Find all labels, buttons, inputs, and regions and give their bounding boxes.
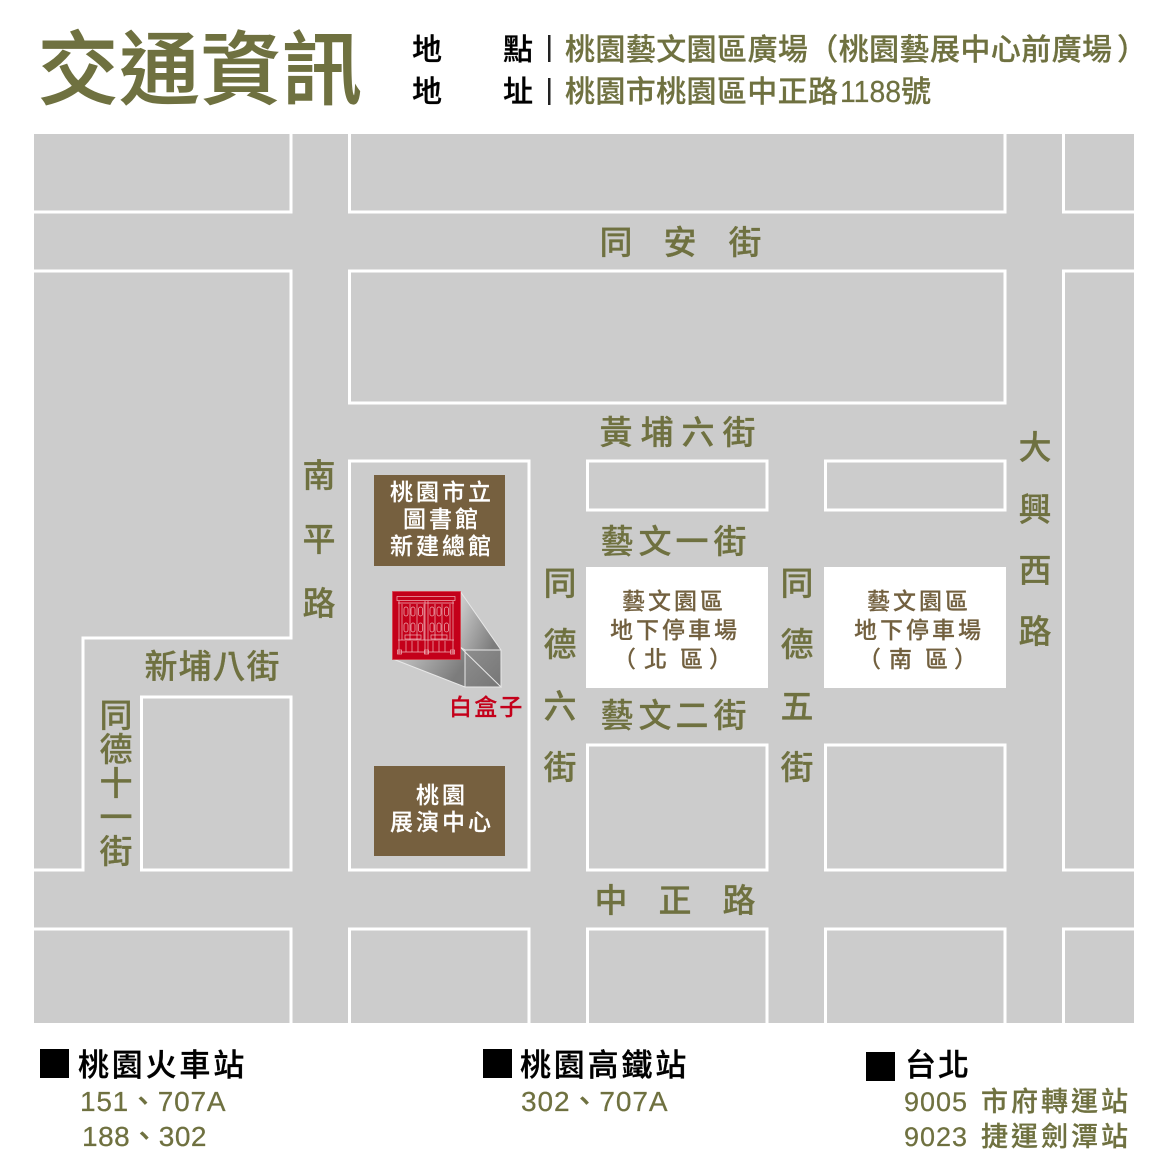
road: 黃埔六街 <box>600 414 756 451</box>
road: 同德六街: 六 <box>544 688 576 725</box>
road: 同德六街: 同 <box>544 565 576 602</box>
location info <box>412 34 1147 109</box>
road: 中正路 <box>594 882 756 919</box>
location info: 桃園市桃園區中正路 <box>565 76 838 109</box>
transit: Taoyuan station: 桃園火車站 <box>78 1048 247 1083</box>
building: library: 新建總館 <box>390 533 494 559</box>
road: 南平路: 路 <box>302 585 336 622</box>
transit: Taipei <box>866 1048 1131 1152</box>
road: 同德六街: 街 <box>544 749 576 786</box>
transit: Taipei: 9005 <box>904 1087 968 1117</box>
road: 新埔八街: 埔 <box>178 648 212 685</box>
transit: high speed rail <box>483 1048 689 1117</box>
parking: north: 藝文園區 <box>622 588 726 614</box>
transit: Taipei: 市府轉運站 <box>981 1087 1131 1117</box>
road: 南平路: 南 <box>302 457 336 494</box>
road: 同德五街: 同 <box>780 565 814 602</box>
road: 中正路: 中 <box>594 882 628 919</box>
transit: Taipei: 9023 <box>904 1122 968 1152</box>
parking: north: （ <box>613 646 636 672</box>
transit: Taoyuan station: 188、302 <box>82 1121 208 1152</box>
road: 新埔八街 <box>144 648 280 685</box>
road: 同德十一街: 十 <box>100 765 132 802</box>
road: 同德五街: 德 <box>780 626 814 663</box>
transit: high speed rail: 302、707A <box>521 1086 669 1117</box>
road: 藝文二街: 街 <box>714 697 746 734</box>
road: 藝文一街 <box>600 523 746 560</box>
building: library: 圖書館 <box>403 506 481 532</box>
parking: north: 地下停車場 <box>610 617 740 643</box>
road: 大興西路: 大 <box>1018 429 1052 466</box>
road: 新埔八街: 街 <box>246 648 280 685</box>
location info: ） <box>1117 34 1147 67</box>
road: 同德十一街: 同 <box>100 697 132 734</box>
transit: Taipei: 台北 <box>905 1048 971 1083</box>
road: 同德五街: 五 <box>780 688 814 725</box>
road: 藝文二街 <box>600 697 746 734</box>
transit: Taipei: 捷運劍潭站 <box>981 1122 1131 1152</box>
location info: 桃園藝文園區廣場（桃園藝展中心前廣場 <box>565 34 1112 67</box>
map background <box>34 134 1134 1023</box>
parking: south: 地下停車場 <box>854 617 984 643</box>
road: 同德六街: 德 <box>544 626 576 663</box>
road: 黃埔六街: 六 <box>682 414 714 451</box>
road: 同德五街 <box>780 565 814 786</box>
road: 藝文二街: 二 <box>676 697 708 734</box>
building: library <box>374 475 505 566</box>
road: 同德六街 <box>544 565 576 786</box>
building: performance center <box>374 766 505 856</box>
road: 大興西路: 路 <box>1018 613 1052 650</box>
icon: white box building <box>392 591 501 687</box>
road: 同德十一街: 一 <box>100 799 132 836</box>
road: 同安街: 安 <box>664 224 696 261</box>
road: 黃埔六街: 埔 <box>640 414 674 451</box>
road: 中正路: 正 <box>658 882 692 919</box>
road: 藝文二街: 藝 <box>600 697 634 734</box>
transit: high speed rail: 桃園高鐵站 <box>520 1048 689 1083</box>
building: performance center: 桃園 <box>416 782 468 808</box>
road: 藝文一街: 文 <box>638 523 672 560</box>
parking: south: ） <box>954 646 977 672</box>
road: 同德十一街 <box>100 697 132 870</box>
road: 同安街: 街 <box>728 224 762 261</box>
location info: 號 <box>901 76 931 109</box>
road: 大興西路: 西 <box>1018 552 1052 589</box>
road: 大興西路: 興 <box>1018 491 1052 528</box>
road: 同德五街: 街 <box>780 749 814 786</box>
road: 藝文二街: 文 <box>638 697 672 734</box>
parking: north: ） <box>709 646 732 672</box>
location info: 點 <box>503 34 533 67</box>
transit: Taoyuan station <box>40 1048 247 1152</box>
road: 同安街: 同 <box>600 224 632 261</box>
parking: south: 區 <box>925 646 948 672</box>
transit: Taoyuan station: 151、707A <box>80 1086 227 1117</box>
building: library: 桃園市立 <box>390 479 494 505</box>
road: 藝文一街: 一 <box>676 523 708 560</box>
parking: south: 藝文園區 <box>867 588 971 614</box>
road: 大興西路 <box>1018 429 1052 650</box>
road: 同德十一街: 德 <box>100 731 132 768</box>
building: performance center: 展演中心 <box>390 809 494 835</box>
label: 白盒子: 白盒子 <box>449 694 525 720</box>
title: 交通資訊 <box>38 26 362 115</box>
road: 黃埔六街: 街 <box>722 414 756 451</box>
parking: south <box>824 567 1006 688</box>
parking: south: 南 <box>889 646 912 672</box>
location info: 址 <box>503 76 533 109</box>
road: 南平路: 平 <box>302 521 336 558</box>
road: 同安街 <box>600 224 762 261</box>
road: 新埔八街: 八 <box>212 648 246 685</box>
parking: south: （ <box>858 646 881 672</box>
road: 藝文一街: 街 <box>714 523 746 560</box>
road: 藝文一街: 藝 <box>600 523 634 560</box>
road: 南平路 <box>302 457 336 622</box>
road: 新埔八街: 新 <box>144 648 178 685</box>
parking: north <box>586 567 768 688</box>
location info: 1188 <box>840 74 901 109</box>
road: 黃埔六街: 黃 <box>600 414 632 451</box>
road: 中正路: 路 <box>722 882 756 919</box>
city block outlines <box>34 134 1134 1023</box>
map <box>34 134 1134 1023</box>
parking: north: 北 <box>644 646 667 672</box>
parking: north: 區 <box>680 646 703 672</box>
road: 同德十一街: 街 <box>100 833 132 870</box>
location info: 地 <box>412 34 442 67</box>
location info: 地 <box>412 76 442 109</box>
